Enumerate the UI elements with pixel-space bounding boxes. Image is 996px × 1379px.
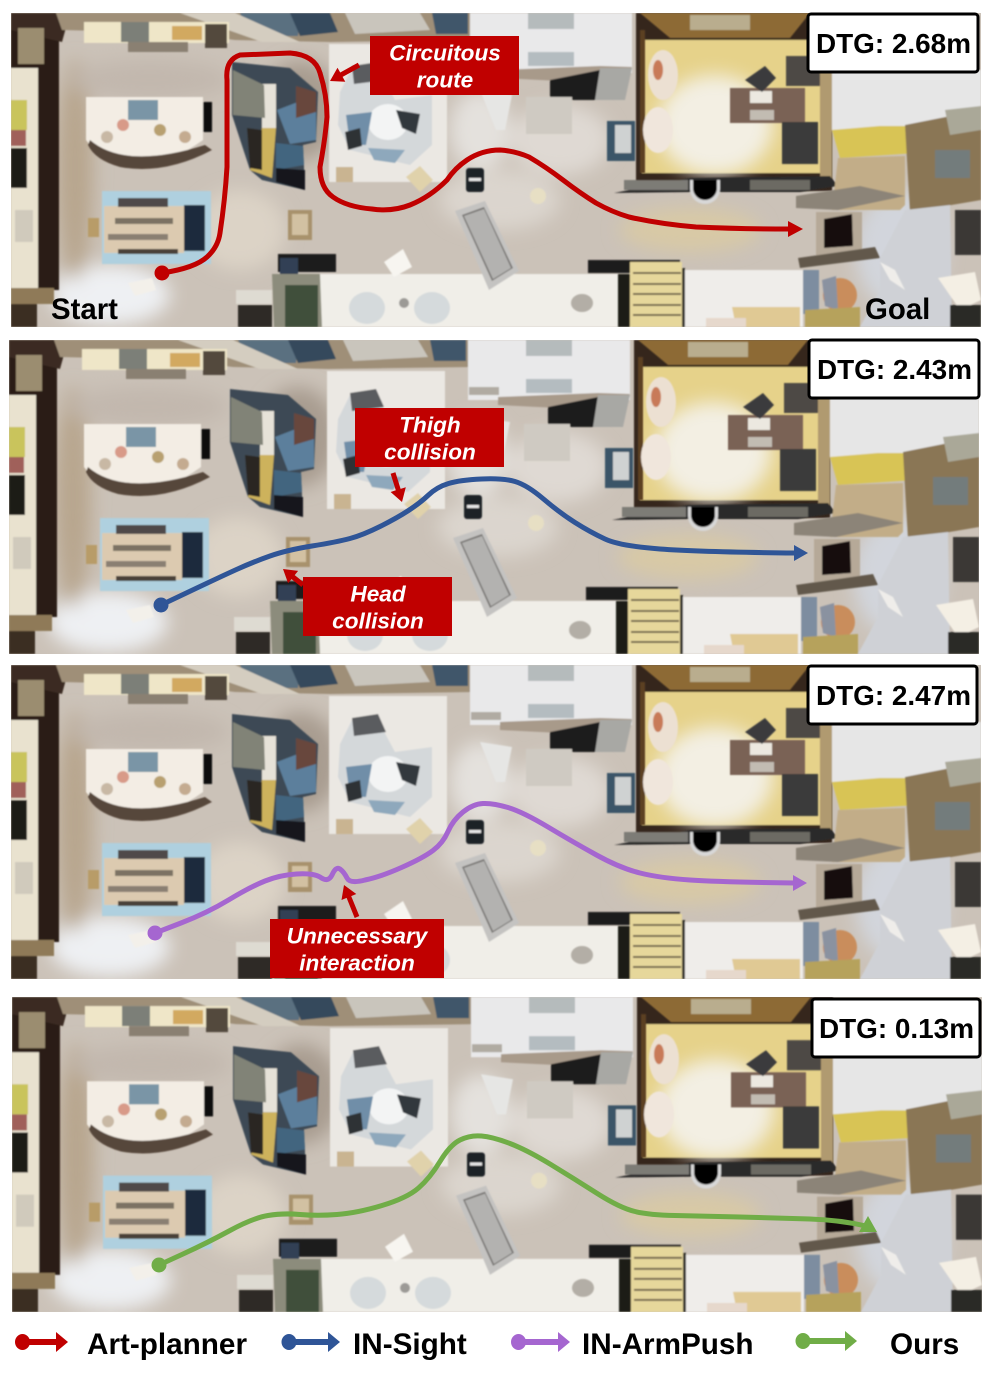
- badge: DTG 0.13m: DTG: 0.13m: [819, 1013, 974, 1044]
- legend item: Art-planner: Art-planner: [87, 1328, 247, 1361]
- callout: circuitous route: [330, 36, 519, 95]
- panel 1: Art-planner: [11, 13, 981, 327]
- legend item: Ours: Ours: [890, 1328, 959, 1361]
- scene 3: floor plan: [11, 665, 981, 979]
- scene 1: floor plan: [11, 13, 981, 327]
- badge: DTG 2.47m: DTG: 2.47m: [816, 680, 971, 711]
- legend item: Ours: [796, 1328, 959, 1361]
- badge: DTG 2.43m: DTG: 2.43m: [817, 354, 972, 385]
- scene 2: floor plan: [9, 340, 979, 654]
- badge: DTG 2.68m: DTG: 2.68m: [816, 28, 971, 59]
- callout: head collision: Head: [350, 582, 407, 606]
- path: IN-Sight blue route: [154, 479, 808, 612]
- legend item: Art-planner: [15, 1328, 247, 1361]
- badge: DTG 0.13m: [812, 999, 980, 1057]
- path: Art-planner red route: [154, 53, 803, 280]
- label: goal: Goal: [865, 293, 930, 326]
- callout: circuitous route: route: [417, 68, 473, 92]
- legend item: IN-Sight: [282, 1328, 467, 1361]
- panel 4: Ours: [12, 997, 982, 1312]
- panel 3: IN-ArmPush: [11, 665, 981, 979]
- callout: unnecessary interaction: [270, 885, 444, 978]
- callout: unnecessary interaction: interaction: [299, 950, 415, 976]
- legend item: IN-ArmPush: IN-ArmPush: [582, 1328, 754, 1361]
- callout: thigh collision: collision: [384, 440, 476, 464]
- callout: thigh collision: [355, 408, 504, 502]
- badge: DTG 2.43m: [809, 340, 979, 398]
- callout: thigh collision: Thigh: [399, 412, 461, 438]
- legend: [15, 1328, 959, 1361]
- scene 4: floor plan: [12, 997, 982, 1312]
- label: start: Start: [51, 293, 118, 326]
- callout: head collision: [283, 569, 452, 636]
- callout: unnecessary interaction: Unnecessary: [287, 924, 429, 948]
- badge: DTG 2.47m: [808, 666, 977, 724]
- legend item: IN-Sight: IN-Sight: [353, 1328, 467, 1361]
- badge: DTG 2.68m: [808, 14, 978, 72]
- panel 2: IN-Sight: [9, 340, 979, 654]
- path: IN-ArmPush purple route: [148, 803, 807, 940]
- callout: circuitous route: Circuitous: [389, 40, 501, 66]
- callout: head collision: collision: [332, 608, 424, 634]
- path: Ours green route: [152, 1136, 877, 1272]
